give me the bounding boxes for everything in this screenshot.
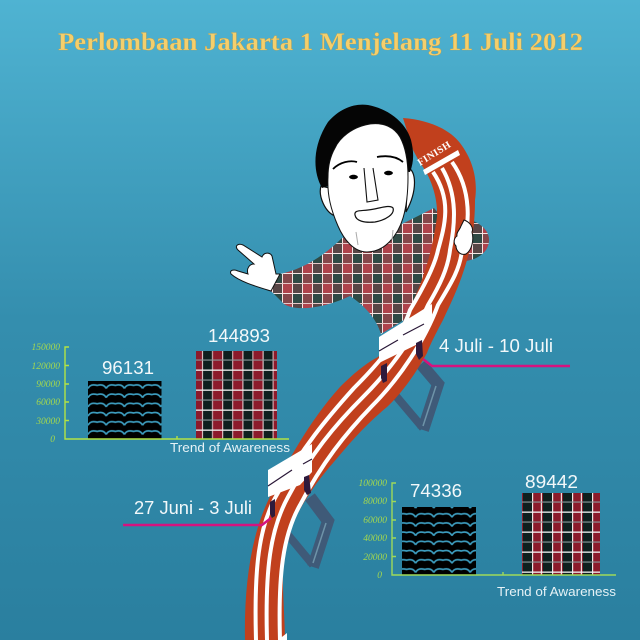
y axis labels: 60000 (363, 516, 387, 526)
character shirt (271, 208, 489, 334)
left hand (231, 244, 280, 291)
nose (364, 168, 378, 202)
black bar (88, 381, 162, 439)
head (315, 105, 414, 252)
y axis labels: 80000 (363, 497, 387, 507)
value 74336: 74336 (410, 481, 462, 501)
y axis labels (32, 343, 60, 445)
y axis labels: 0 (50, 435, 55, 445)
magenta leader (423, 359, 570, 366)
y axis labels: 0 (377, 571, 382, 581)
y axis labels (358, 479, 387, 581)
finish band (423, 150, 460, 175)
date marker upper (423, 336, 570, 366)
face (328, 124, 408, 252)
shadow: upper runner legs (385, 364, 438, 430)
white tape shape (379, 304, 432, 363)
white tape shape (268, 444, 312, 497)
value 89442: 89442 (525, 472, 578, 492)
mouth (355, 206, 393, 222)
bar chart left (32, 326, 291, 455)
tape mark (379, 324, 424, 351)
running track (245, 118, 476, 640)
shirt body and arm (271, 208, 448, 334)
ears (320, 168, 414, 216)
date label: 4 Juli - 10 Juli (439, 336, 553, 356)
y axis labels: 40000 (363, 534, 387, 544)
lane line left (256, 172, 445, 640)
y axis labels: 20000 (363, 553, 387, 563)
finish label: FINISH (416, 139, 453, 169)
title: Perlombaan Jakarta 1 Menjelang 11 Juli 2012 (58, 29, 583, 56)
chin lines (356, 230, 393, 245)
y axis labels: 150000 (32, 343, 60, 353)
lane line right (280, 162, 468, 640)
right hand (454, 220, 473, 254)
track end mark (278, 633, 287, 640)
date marker lower (123, 498, 271, 525)
lane line middle (267, 168, 454, 640)
y axis labels: 100000 (358, 479, 387, 489)
y axis labels: 120000 (32, 362, 60, 372)
bar chart right (358, 472, 617, 599)
shirt sleeve behind track (440, 217, 489, 262)
plaid bar (196, 351, 277, 439)
axes (65, 347, 289, 439)
axes (392, 483, 616, 575)
plaid bar (522, 493, 600, 575)
hair (315, 105, 413, 188)
value 144893: 144893 (208, 326, 270, 346)
magenta leader (123, 518, 271, 525)
y axis labels: 30000 (35, 417, 60, 427)
shadow: lower runner legs (274, 497, 328, 567)
lower tape (268, 444, 312, 497)
tape mark (268, 459, 312, 486)
value 96131: 96131 (102, 358, 154, 378)
eyebrows (333, 156, 403, 169)
black bar (402, 507, 476, 575)
lower runner feet (270, 475, 311, 518)
upper tape (379, 304, 432, 363)
date label: 27 Juni - 3 Juli (134, 498, 252, 518)
track surface (245, 118, 476, 640)
eyes (349, 171, 393, 179)
y axis labels: 60000 (36, 398, 60, 408)
axis caption: Trend of Awareness (497, 584, 617, 599)
axis caption: Trend of Awareness (170, 440, 291, 455)
y axis labels: 90000 (36, 380, 60, 390)
upper runner feet (381, 340, 423, 383)
